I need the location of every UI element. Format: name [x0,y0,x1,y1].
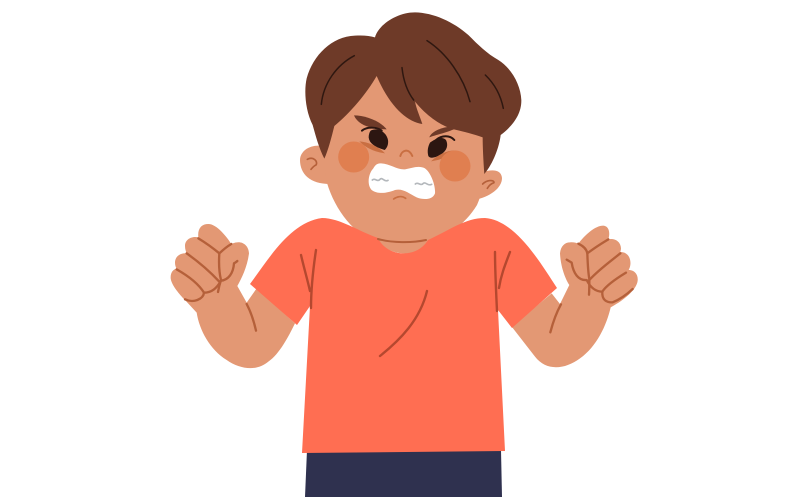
right arm and fist [512,226,638,367]
neck line [378,239,426,242]
hair [305,12,521,174]
teeth lines [372,179,432,185]
chin mark [394,197,406,199]
eyebrows [354,115,387,129]
shirt [250,218,557,453]
fist finger lines [550,239,633,332]
hair strands [321,41,503,108]
under-eye lines [359,141,385,153]
face and neck [321,60,490,254]
cheeks [338,141,369,172]
ear lines [307,158,494,188]
shirt fold lines [301,250,510,356]
mouth [369,163,435,199]
fist finger lines [177,238,256,331]
eyelashes [362,128,454,140]
left arm and fist [171,224,295,368]
head details [305,12,521,199]
trousers [305,450,502,497]
ears [300,146,502,200]
nose [400,151,412,156]
eyes [369,129,388,150]
